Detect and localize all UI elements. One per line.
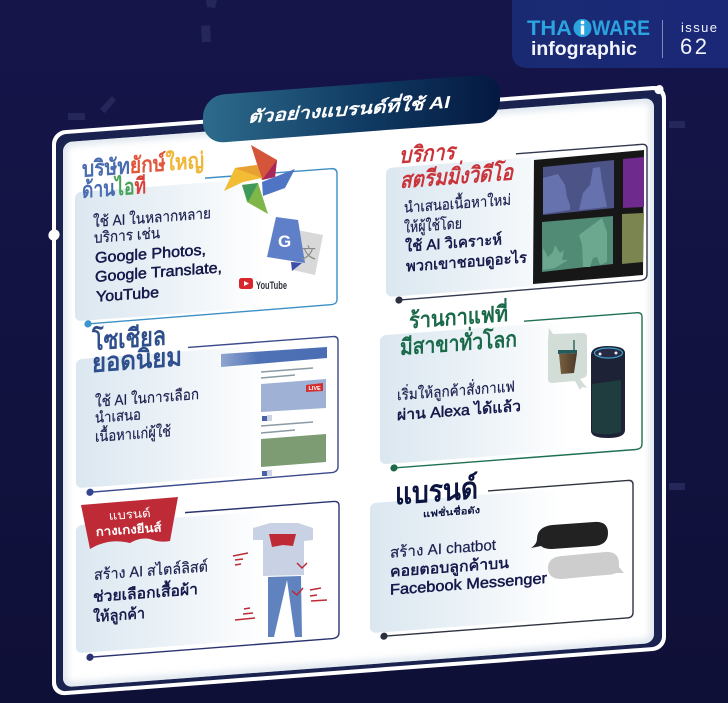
heading: ด้านไอที bbox=[82, 172, 146, 203]
black chat bubble bbox=[531, 522, 608, 549]
panel: coffee bbox=[380, 287, 642, 473]
issue number: 62 bbox=[680, 34, 707, 59]
illustration: coffee card bbox=[548, 328, 587, 390]
banner text: แบรนด์ bbox=[108, 506, 151, 523]
issue label: issue bbox=[681, 20, 717, 35]
logo mark: i in circle bbox=[574, 19, 592, 37]
body text: สร้าง AI chatbot bbox=[390, 537, 497, 562]
illustration: chat bubbles bbox=[531, 522, 624, 579]
youtube wordmark: YouTube bbox=[256, 280, 287, 292]
heading: มีสาขาทั่วโลก bbox=[400, 322, 517, 360]
decorative dashes bbox=[68, 0, 685, 490]
body text bbox=[95, 385, 199, 446]
heading: บริษัทยักษ์ใหญ่ bbox=[82, 147, 204, 183]
banner: jeans brand: กางเกงยีนส์ bbox=[95, 520, 163, 539]
heading bbox=[400, 296, 517, 360]
illustration: shirt and jeans bbox=[233, 523, 327, 637]
body text bbox=[390, 533, 547, 599]
G letter: G bbox=[278, 232, 291, 251]
heading: ยอดนิยม bbox=[92, 341, 182, 378]
body text: ใช้ AI ในการเลือก bbox=[95, 385, 199, 411]
body text: ช่วยเลือกเสื้อผ้า bbox=[93, 578, 198, 606]
body text: บริการ เช่น bbox=[94, 225, 160, 247]
body text: นำเสนอเนื้อหาใหม่ bbox=[404, 189, 511, 217]
body text: Google Translate, bbox=[95, 259, 222, 286]
body text: Google Photos, bbox=[95, 242, 206, 267]
title text: ตัวอย่างแบรนด์ที่ใช้ AI bbox=[248, 90, 452, 127]
icon: google translate bbox=[267, 217, 323, 275]
body text: Facebook Messenger bbox=[390, 570, 547, 599]
heading: แฟชั่นชื่อดัง bbox=[423, 503, 480, 519]
panel: fashion bbox=[370, 460, 633, 641]
body text: เริ่มให้ลูกค้าสั่งกาแฟ bbox=[397, 375, 515, 404]
body text: ใช้ AI วิเคราะห์ bbox=[405, 230, 502, 256]
panel: social bbox=[76, 307, 338, 497]
body text: สร้าง AI สไตล์ลิสต์ bbox=[94, 557, 208, 584]
heading bbox=[82, 147, 204, 203]
heading bbox=[399, 134, 515, 193]
body text: ให้ผู้ใช้โดย bbox=[404, 214, 462, 237]
logo subtitle: infographic: infographic bbox=[531, 39, 637, 60]
panel: big tech bbox=[75, 137, 337, 328]
body text: นำเสนอ bbox=[95, 406, 141, 427]
heading: โซเชียล bbox=[91, 320, 166, 356]
body text bbox=[93, 203, 222, 306]
body text: ใช้ AI ในหลากหลาย bbox=[93, 204, 211, 231]
icon: google photos pinwheel bbox=[224, 145, 295, 214]
body text: คอยตอบลูกค้าบน bbox=[390, 555, 509, 581]
illustration: smart speaker bbox=[591, 346, 625, 438]
grey chat bubble bbox=[548, 552, 624, 579]
heading: แบรนด์ bbox=[395, 471, 478, 511]
title pill bbox=[203, 73, 500, 144]
logo wordmark: WARE: WARE bbox=[592, 17, 650, 40]
logo badge bbox=[512, 0, 728, 68]
board frame bbox=[48, 85, 666, 696]
body text bbox=[397, 375, 521, 424]
translate glyph: 文 bbox=[301, 242, 316, 263]
skewed infographic board bbox=[48, 61, 666, 696]
body text bbox=[93, 557, 208, 626]
heading: บริการ bbox=[399, 139, 458, 168]
feed video post bbox=[261, 379, 326, 412]
body text: พวกเขาชอบดูอะไร bbox=[406, 248, 527, 276]
panel: jeans bbox=[76, 501, 339, 662]
heading bbox=[91, 318, 182, 378]
banner: jeans brand bbox=[81, 497, 178, 549]
body text: YouTube bbox=[96, 284, 159, 306]
body text: ให้ลูกค้า bbox=[93, 604, 145, 626]
live tag: LIVE bbox=[308, 386, 321, 392]
heading: ร้านกาแฟที่ bbox=[409, 297, 508, 333]
feed photo post bbox=[261, 434, 326, 467]
heading: สตรีมมิ่งวิดีโอ bbox=[400, 155, 515, 193]
logo wordmark: THA: THA bbox=[527, 17, 572, 40]
illustration: social feed bbox=[221, 347, 327, 476]
panel: streaming bbox=[386, 125, 647, 305]
illustration: streaming screen grid bbox=[533, 150, 644, 284]
icon: youtube bbox=[239, 278, 287, 292]
body text: ผ่าน Alexa ได้แล้ว bbox=[397, 397, 521, 424]
body text: เนื้อหาแก่ผู้ใช้ bbox=[95, 420, 171, 446]
feed header bbox=[221, 347, 327, 367]
body text bbox=[404, 187, 527, 276]
